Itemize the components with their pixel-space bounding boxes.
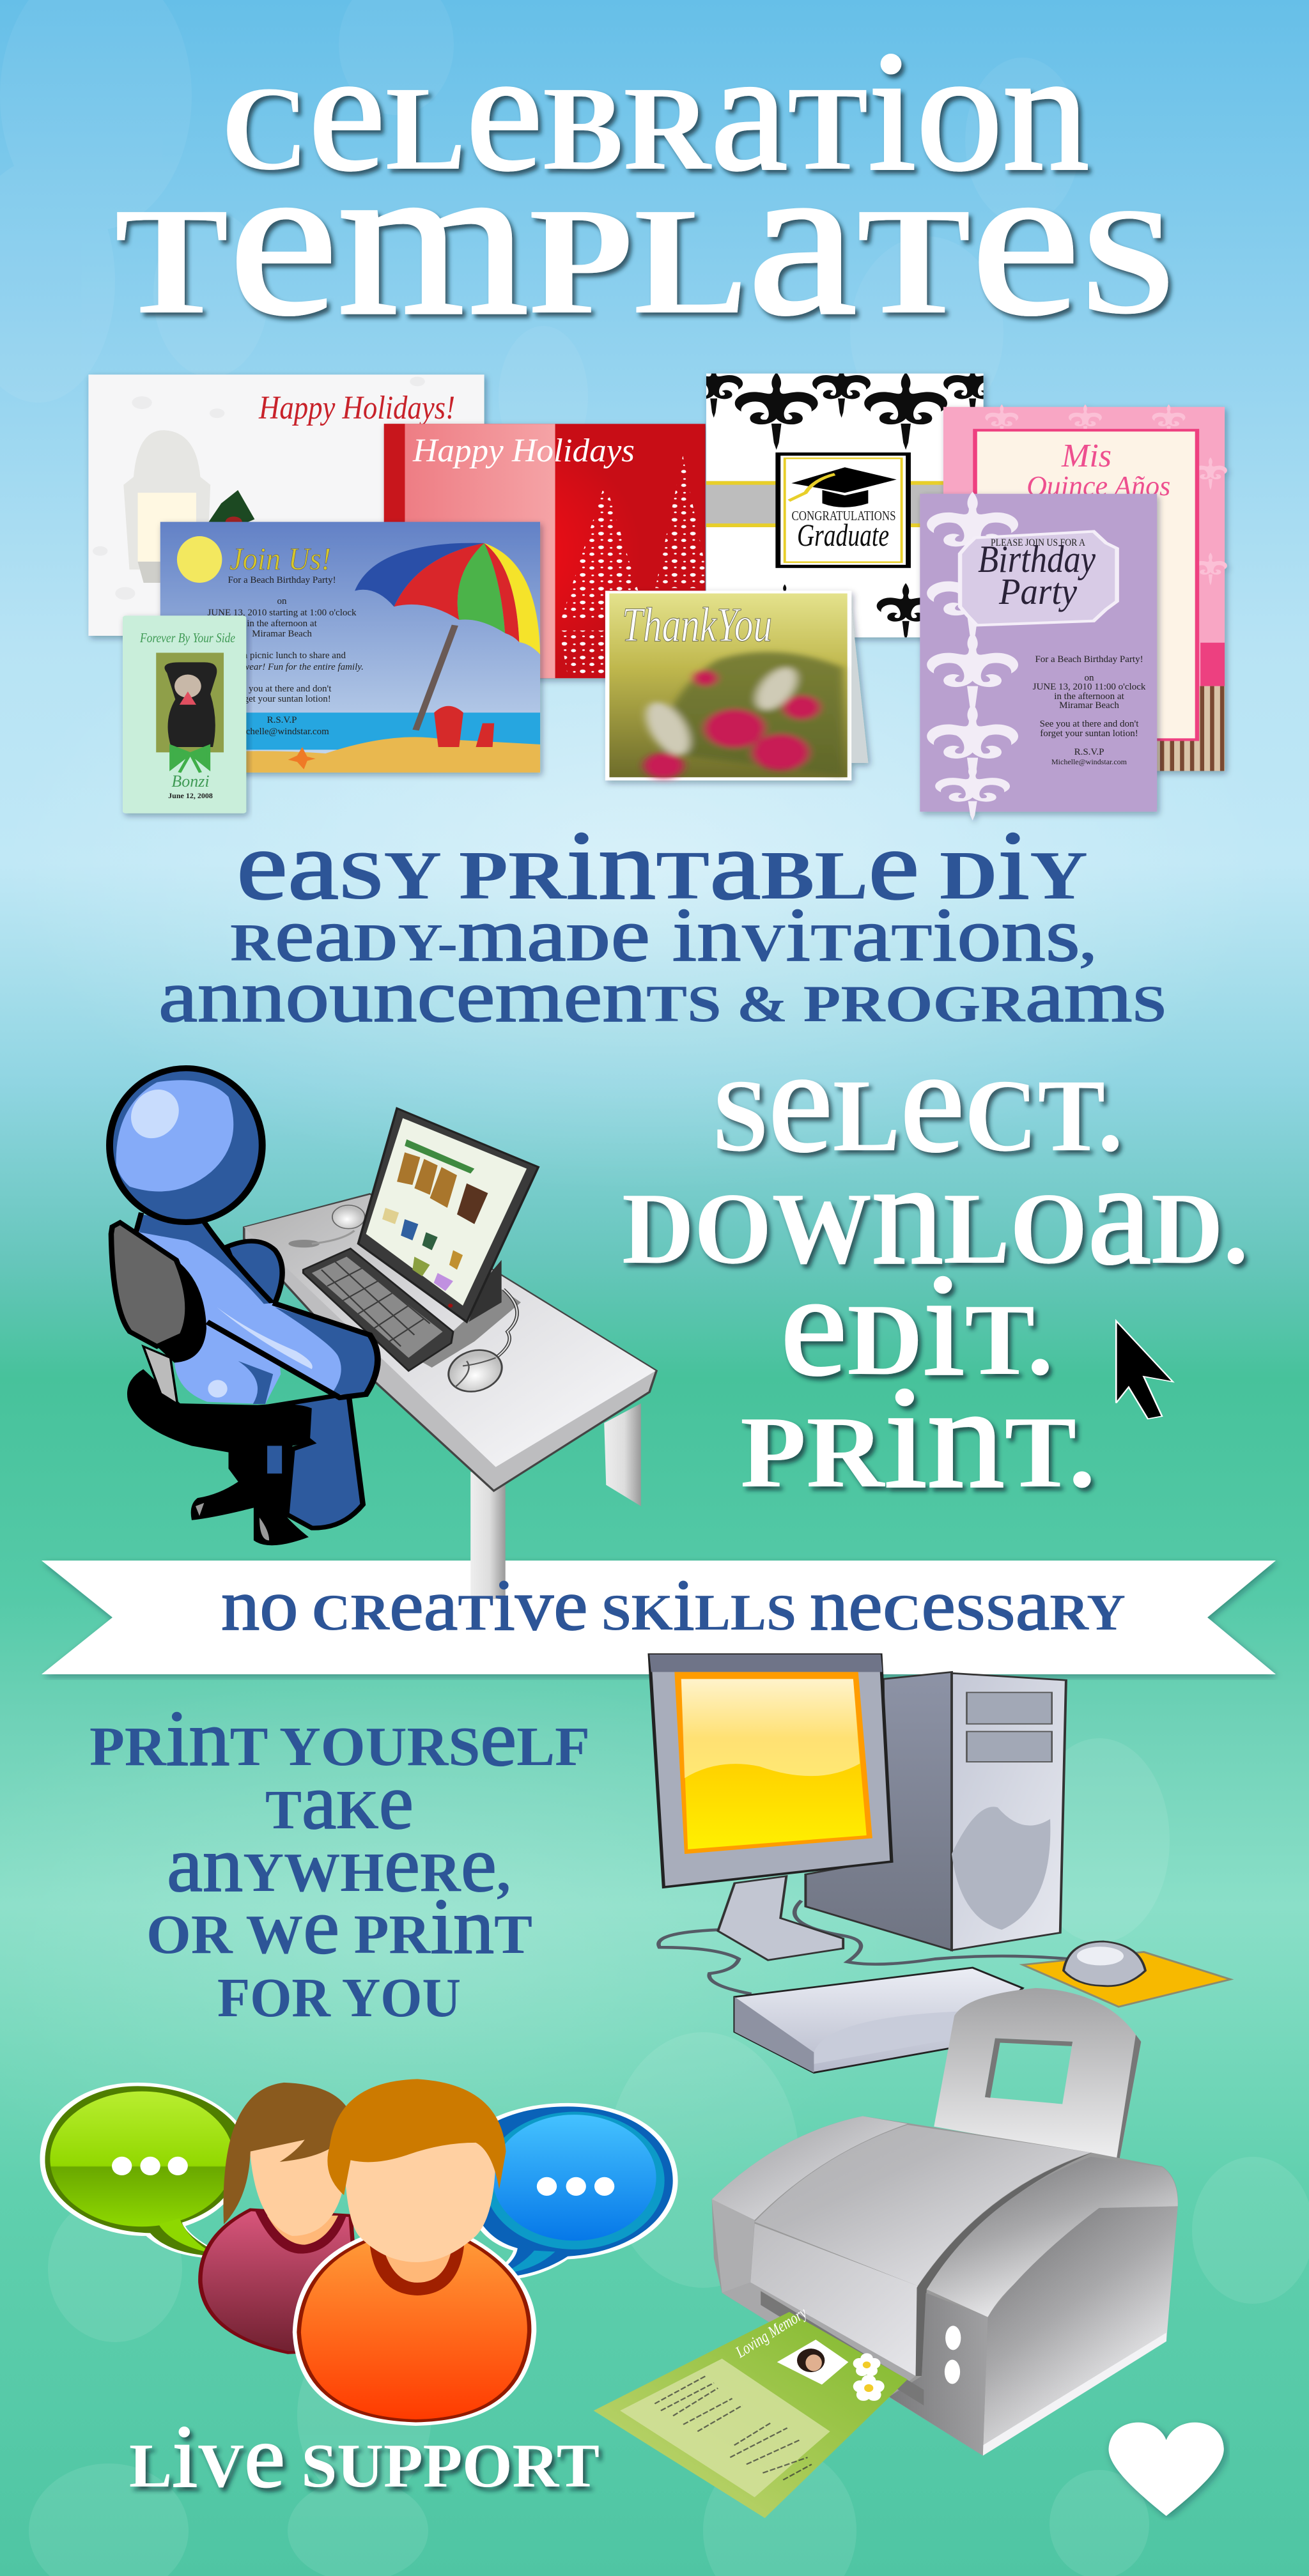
desk <box>244 1194 656 1599</box>
card: pink: Mis <box>1061 438 1111 474</box>
subtitle: easy printable DIY: ReaDY-ma De in ViTaTions , <box>230 892 1096 977</box>
mouse and pad <box>1023 1941 1230 2007</box>
card: purple birthday: Birthday <box>978 538 1096 580</box>
card: graduation: Graduate <box>797 517 889 553</box>
card: red holiday: Happy Holidays <box>412 433 635 469</box>
step words: select download edit print: SeLeCT. <box>712 1019 1123 1183</box>
card: pet bookmark: June 12, 2008 <box>168 791 213 800</box>
monitor with website <box>358 1108 538 1322</box>
card: pet bookmark: Forever By Your Side <box>139 630 235 645</box>
text: print yourself: PRinT YOURSeLF <box>89 1694 590 1782</box>
subtitle: easy printable DIY <box>159 811 1166 1038</box>
chair back <box>111 1222 206 1362</box>
card: purple birthday: Miramar Beach <box>1059 700 1119 711</box>
card: graduation <box>704 372 989 644</box>
icon: mouse cursor <box>1116 1321 1173 1419</box>
card: pink: Quince Años <box>1026 470 1170 502</box>
card: thank you <box>605 590 868 780</box>
tower <box>805 1672 1066 1950</box>
card: purple birthday: JUNE 13, 2010 11:00 o'clock <box>1033 682 1146 692</box>
card: white holiday <box>88 374 484 636</box>
card: red holiday <box>384 424 709 678</box>
card: purple birthday: PLEASE JOIN US FOR A <box>991 537 1085 548</box>
man figure <box>297 2079 532 2423</box>
card: graduation: CONGRATULATIONS <box>791 508 896 523</box>
printed brochure <box>594 2312 908 2518</box>
card: purple birthday: For a Beach Birthday Party! <box>1035 654 1143 665</box>
card: white holiday: Happy Holidays! <box>258 390 455 426</box>
card: purple birthday: forget your suntan lotion! <box>1040 729 1138 739</box>
card: beach invitation: For a Beach Birthday Party! <box>228 575 336 585</box>
keyboard <box>303 1249 453 1371</box>
card: purple birthday <box>920 491 1157 821</box>
card: beach invitation: bring swimwear! Fun for the entire family. <box>200 662 364 672</box>
paper tray <box>934 1988 1141 2159</box>
illustration: person at desk <box>109 1068 656 1599</box>
title: CeLeBRaTion <box>221 16 1089 206</box>
card: beach invitation: JUNE 13, 2010 starting at 1:00 o'clock <box>207 608 357 618</box>
card: beach invitation: Join Us! <box>229 541 331 576</box>
card: thank you: ThankYou <box>622 598 772 652</box>
woman figure <box>200 2083 360 2352</box>
title: TemPLaTeS <box>114 118 1175 360</box>
card: beach invitation: in the afternoon at <box>247 619 318 629</box>
step words: select download edit print: DOWnLOaD. <box>622 1133 1248 1295</box>
illustration: printer <box>594 1988 1178 2518</box>
step words: select download edit print: eDiT. <box>780 1244 1053 1406</box>
step words: select download edit print <box>622 1019 1248 1518</box>
blue speech bubble <box>464 2103 678 2280</box>
card collage <box>88 360 1227 821</box>
card: beach invitation: Enjoy a picnic lunch to share and <box>218 651 346 661</box>
card: beach invitation: Miramar Beach <box>252 629 312 639</box>
subtitle: easy printable DIY: announcemen TS & PROGR am S <box>159 955 1166 1038</box>
card: pet bookmark <box>123 615 246 814</box>
card: beach invitation <box>160 522 540 773</box>
card: pink <box>943 405 1227 771</box>
illustration: chat support people <box>40 2079 678 2423</box>
text: print yourself: TaKe <box>265 1757 414 1846</box>
live support label: LiVe SUPPORT <box>129 2407 600 2506</box>
text: print yourself: OR We PRinT <box>146 1882 532 1970</box>
card: purple birthday: Michelle@windstar.com <box>1051 757 1127 766</box>
banner text: no CReaTive SKiLLS neCeSSaRY <box>221 1564 1126 1646</box>
printer body <box>712 2116 1178 2456</box>
head <box>109 1068 262 1222</box>
card: pet bookmark: Bonzi <box>171 772 210 791</box>
card: purple birthday: Party <box>998 571 1077 612</box>
brochure heading: Loving Memory <box>732 2303 810 2361</box>
cables <box>658 1901 1069 1994</box>
seat and legs <box>127 1346 363 1545</box>
card: beach invitation: on <box>277 596 287 606</box>
icon: heart <box>1109 2423 1224 2516</box>
green speech bubble <box>40 2083 244 2259</box>
illustration: desktop computer <box>649 1654 1230 2072</box>
card: purple birthday: in the afternoon at <box>1054 691 1125 702</box>
subtitle: easy printable DIY: eaSY PR inTaBLe DiY <box>236 811 1088 920</box>
card: purple birthday: on <box>1084 673 1094 683</box>
title <box>114 16 1175 360</box>
card: beach invitation: forget your suntan lotion! <box>233 694 331 704</box>
card: beach invitation: Michelle@windstar.com <box>235 727 329 737</box>
torso and arms <box>136 1213 378 1404</box>
text: print yourself: FOR YOU <box>217 1966 461 2028</box>
card: purple birthday: R.S.V.P <box>1074 747 1104 757</box>
card: beach invitation: R.S.V.P <box>267 715 297 725</box>
banner ribbon <box>42 1561 1276 1674</box>
monitor <box>649 1654 892 1960</box>
text: print yourself: anYWHeRe, <box>167 1820 511 1908</box>
keyboard <box>734 1968 1023 2072</box>
text: print yourself <box>89 1694 590 2028</box>
card: beach invitation: See you at there and don't <box>233 684 332 694</box>
step words: select download edit print: PRinT. <box>740 1357 1096 1518</box>
card: purple birthday: See you at there and don't <box>1040 719 1139 729</box>
